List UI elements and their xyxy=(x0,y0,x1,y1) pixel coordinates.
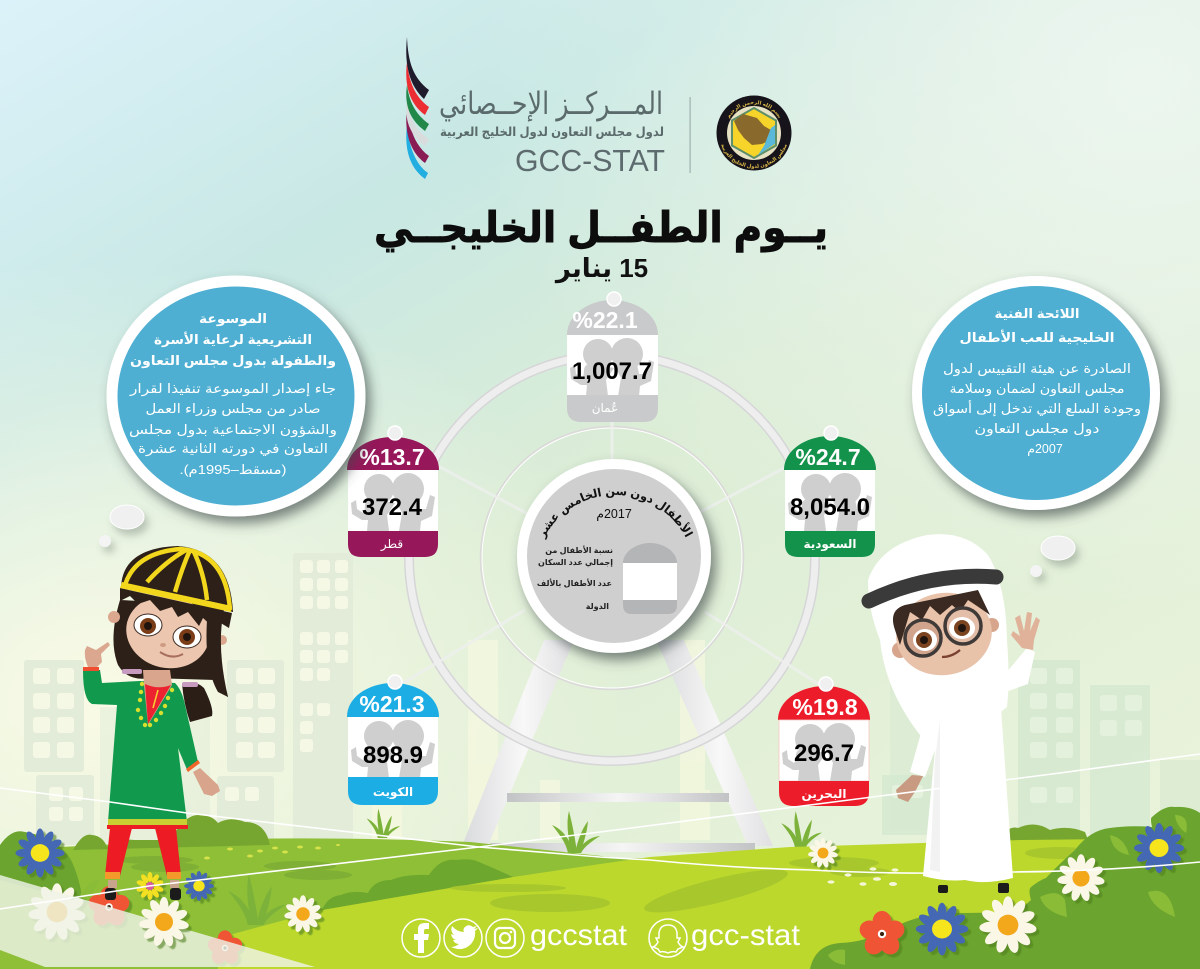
girl eyes xyxy=(134,614,201,648)
ferris wheel structure xyxy=(400,340,828,852)
data tag: Oman: %22.1 xyxy=(572,307,638,333)
girl right hair strand xyxy=(206,615,228,697)
logo: ribbon mark xyxy=(406,37,429,179)
bubble body left: (مسقط–1995م). xyxy=(180,462,286,477)
flowers behind overlay xyxy=(16,823,1184,966)
subtitle date: 15 يناير xyxy=(554,253,648,284)
bubble body left xyxy=(129,381,337,477)
data tag: Qatar xyxy=(347,426,439,557)
boy agal xyxy=(869,576,996,601)
bubble body right: وجودة السلع التي تدخل إلى أسواق xyxy=(933,400,1141,417)
data tag: Bahrain: 296.7 xyxy=(794,740,854,767)
bubble disc left xyxy=(112,281,360,511)
social: twitter icon xyxy=(444,919,482,957)
social: snapchat icon xyxy=(649,919,687,957)
data tag: Oman: 1,007.7 xyxy=(572,358,652,385)
logo: GCC-STAT wordmark: GCC-STAT xyxy=(515,143,665,178)
data tag: Qatar: %13.7 xyxy=(359,444,425,470)
boy ghutra xyxy=(868,534,1008,745)
grass tuft field xyxy=(229,875,286,925)
callout bubble left: legislative encyclopedia xyxy=(112,281,360,511)
girl shoes xyxy=(105,888,116,900)
data tag: Qatar: 372.4 xyxy=(362,494,423,521)
bubble heading left: والطفولة بدول مجلس التعاون xyxy=(130,353,336,368)
character: boy xyxy=(868,534,1040,893)
social: facebook icon xyxy=(402,919,440,957)
boy shoes xyxy=(938,885,948,893)
grass tufts behind ground xyxy=(367,809,822,853)
bubble body left: والشؤون الاجتماعية بدول مجلس xyxy=(129,422,337,438)
data tag: Saudi Arabia: 8,054.0 xyxy=(790,494,870,521)
data tag: Kuwait: 898.9 xyxy=(363,742,423,769)
data tag: Bahrain xyxy=(778,677,870,806)
data tag: Oman: عُمان xyxy=(592,401,618,415)
thought dots right xyxy=(1030,536,1075,577)
logo: organisation name Arabic xyxy=(439,86,664,139)
girl fringe xyxy=(120,588,232,628)
data tag: Kuwait: %21.3 xyxy=(359,691,425,717)
data tag: Oman xyxy=(567,292,658,422)
data tag: Saudi Arabia xyxy=(784,426,876,557)
background city buildings left xyxy=(24,553,353,847)
hub heading curved: الأطفال دون سن الخامس عشر xyxy=(543,488,694,540)
hub legend labels: نسبة الأطفال من xyxy=(545,545,613,555)
hub year: 2017م xyxy=(596,507,632,521)
girl legs xyxy=(105,828,132,876)
bubble heading right xyxy=(960,306,1114,345)
data tag: Qatar: قطر xyxy=(380,537,403,552)
girl neck and collar xyxy=(143,670,172,725)
bubble body left: جاء إصدار الموسوعة تنفيذا لقرار xyxy=(129,381,336,397)
boy face xyxy=(892,642,908,658)
GCC emblem: مجلس التعاون لدول الخليج العربية xyxy=(721,144,787,170)
girl hands xyxy=(85,642,110,667)
boy glasses and eyes xyxy=(905,608,981,656)
hub legend labels: عدد الأطفال بالألف xyxy=(537,578,612,588)
social handle gccstat: gccstat xyxy=(530,919,628,952)
data tag: Saudi Arabia: السعودية xyxy=(803,537,857,552)
data tag: Kuwait: الكويت xyxy=(373,785,413,800)
large bush right xyxy=(810,807,1200,969)
social handle gcc-stat: gcc-stat xyxy=(691,919,801,952)
bubble heading left xyxy=(130,311,336,368)
bubble body right xyxy=(933,361,1141,456)
hub legend tag xyxy=(623,543,677,614)
title: يــوم الطفــل الخليجــي xyxy=(374,204,828,253)
girl dress xyxy=(83,670,198,822)
social: instagram icon xyxy=(486,919,524,957)
bubble body right: دول مجلس التعاون xyxy=(974,421,1100,437)
field speckles xyxy=(204,844,340,860)
girl face xyxy=(108,611,120,623)
ground: meadow xyxy=(0,807,1200,969)
bubble body left: صادر من مجلس وزراء العمل xyxy=(146,401,320,417)
boy hands xyxy=(1011,612,1040,650)
logo divider xyxy=(690,97,691,173)
hub legend labels: الدولة xyxy=(586,602,609,611)
character: girl xyxy=(83,546,233,900)
background city buildings centre and right xyxy=(372,550,1200,845)
girl mouth and nose xyxy=(160,652,183,657)
callout bubble right: toy regulation xyxy=(917,281,1155,505)
left bush xyxy=(0,831,140,918)
bubble heading right: اللائحة الفنية xyxy=(994,306,1080,321)
daisy on overlay xyxy=(139,897,189,947)
shadow patches xyxy=(117,856,352,880)
logo: organisation name Arabic: المـــركــز الإحــصائي xyxy=(439,86,663,122)
bubble body left: التعاون في دورته الثانية عشرة xyxy=(138,441,328,457)
translucent overlay triangle bottom left xyxy=(0,875,315,967)
hub legend labels: إجمالي عدد السكان xyxy=(538,558,613,567)
hub disc xyxy=(522,464,706,648)
data tag: Saudi Arabia: %24.7 xyxy=(795,444,861,470)
centre hub legend xyxy=(513,457,725,669)
boy hair xyxy=(893,590,990,645)
data tag: Bahrain: %19.8 xyxy=(792,694,858,720)
bubble heading right: الخليجية للعب الأطفال xyxy=(960,329,1114,345)
GCC emblem: بسم الله الرحمن الرحيم xyxy=(728,100,780,119)
data tag: Kuwait xyxy=(347,675,439,805)
bubble heading left: الموسوعة xyxy=(199,311,267,326)
thought dots left xyxy=(99,505,144,547)
bubble body right: 2007م xyxy=(1027,442,1063,456)
hub legend labels xyxy=(537,545,613,611)
girl hat xyxy=(120,546,233,612)
boy mouth xyxy=(942,650,960,657)
data tag: Bahrain: البحرين xyxy=(802,787,846,801)
bubble heading left: التشريعية لرعاية الأسرة xyxy=(154,331,312,347)
bubble disc right xyxy=(917,281,1155,505)
girl hair back xyxy=(113,600,228,697)
strings of bunting lines xyxy=(0,754,1200,909)
GCC emblem xyxy=(716,96,792,170)
logo: organisation name Arabic: لدول مجلس التعاون لدول الخليج العربية xyxy=(440,125,664,139)
bubble body right: مجلس التعاون لضمان وسلامة xyxy=(950,381,1124,397)
bubble body right: الصادرة عن هيئة التقييس لدول xyxy=(943,361,1131,377)
boy thobe xyxy=(910,648,1035,882)
